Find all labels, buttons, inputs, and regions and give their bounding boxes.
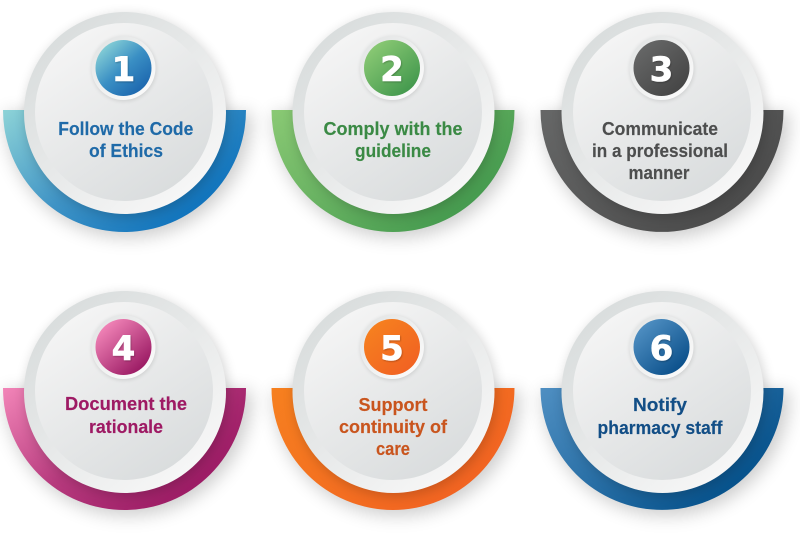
label: step 1: of Ethics: [89, 141, 163, 161]
panel: step 5: [272, 291, 520, 515]
disc: step 1: [24, 12, 228, 217]
number badge: 1: 1: [112, 50, 135, 90]
number badge: 6: 6: [650, 329, 673, 369]
label: step 2: guideline: [355, 141, 431, 161]
label: step 1: Follow the Code: [58, 119, 193, 139]
label: step 5: [339, 395, 448, 459]
arc: step 3: [540, 110, 790, 238]
label: step 2: [324, 119, 462, 161]
label: step 6: [598, 395, 723, 438]
label: step 4: [65, 394, 187, 437]
number badge: 4: [92, 315, 156, 380]
label: step 6: pharmacy staff: [598, 418, 723, 438]
number badge: 2: 2: [380, 50, 404, 90]
panel: step 4: [3, 291, 252, 516]
label: step 4: Document the: [65, 394, 187, 414]
label: step 5: care: [376, 439, 410, 459]
panel: step 3: [540, 12, 790, 238]
disc: step 3: [562, 12, 766, 217]
label: step 6: Notify: [633, 395, 687, 415]
disc: step 5: [292, 291, 496, 496]
label: step 1: [58, 119, 193, 161]
panel: step 1: [3, 12, 252, 238]
disc: step 2: [292, 12, 496, 217]
label: step 5: continuity of: [339, 417, 448, 437]
label: step 3: Communicate: [602, 119, 718, 139]
disc: step 6: [562, 291, 766, 496]
number badge: 5: [360, 315, 424, 380]
number badge: 1: [92, 36, 156, 101]
label: step 3: manner: [628, 163, 690, 183]
number badge: 6: [630, 315, 694, 380]
disc: step 4: [24, 291, 228, 496]
label: step 5: Support: [358, 395, 428, 415]
number badge: 5: 5: [380, 329, 404, 369]
label: step 2: Comply with the: [324, 119, 462, 139]
label: step 4: rationale: [89, 417, 163, 437]
arc: step 4: [3, 388, 252, 516]
label: step 3: [592, 119, 728, 183]
arc: step 2: [272, 110, 520, 237]
label: step 3: in a professional: [592, 141, 728, 161]
number badge: 3: 3: [650, 50, 673, 90]
number badge: 3: [630, 36, 694, 101]
number badge: 2: [360, 36, 424, 101]
arc: step 6: [540, 388, 790, 516]
arc: step 5: [272, 388, 520, 515]
arc: step 1: [3, 110, 252, 238]
panel: step 2: [272, 12, 520, 237]
panel: step 6: [540, 291, 790, 516]
number badge: 4: 4: [112, 329, 135, 369]
